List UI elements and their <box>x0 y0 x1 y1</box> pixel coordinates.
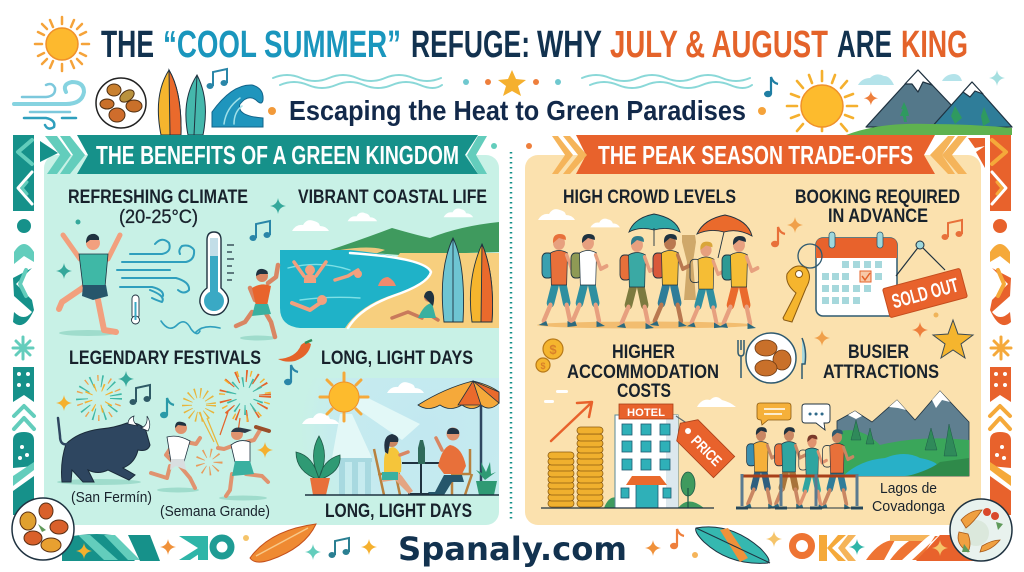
heading banner: trade-offs: THE PEAK SEASON TRADE-OFFS <box>598 140 913 170</box>
icon: sold out sign <box>882 241 968 318</box>
section: refreshing climate: REFRESHING CLIMATE <box>68 187 248 208</box>
icon: sold out sign: SOLD OUT <box>890 275 961 313</box>
icons: bottom decorations right <box>645 529 782 558</box>
umbrellas <box>629 214 752 258</box>
icon: sun right <box>787 71 857 131</box>
decoration: water ripples <box>161 321 220 334</box>
border: bottom left motif <box>62 534 249 561</box>
fireworks <box>79 373 268 471</box>
caption: Lagos de Covadonga: Lagos de <box>880 480 937 497</box>
icon: bull <box>57 416 150 485</box>
section: legendary festivals <box>56 348 273 520</box>
icon: key <box>783 244 822 322</box>
caption: Semana Grande: (Semana Grande) <box>160 503 270 520</box>
icon: coins: $ <box>549 342 557 357</box>
title: THE <box>101 24 154 66</box>
icon: sparkle <box>56 263 72 279</box>
section: busier attractions <box>736 342 969 515</box>
heading banner: benefits: THE BENEFITS OF A GREEN KINGDOM <box>96 140 459 170</box>
icon: bottom orange surfboard <box>250 524 316 562</box>
icon: mountains <box>846 70 1012 135</box>
icon: tree <box>681 472 695 508</box>
icon: plate and cutlery <box>738 333 806 383</box>
title: “COOL SUMMER” <box>163 24 401 66</box>
section: accommodation costs: HIGHER <box>612 342 675 363</box>
title: WHY <box>537 24 602 66</box>
icon: bottom teal surfboard <box>696 527 770 563</box>
illustration: beach <box>280 208 499 328</box>
section: refreshing climate <box>56 187 286 336</box>
icon: price tag <box>670 413 735 478</box>
icon: jumping person <box>59 234 120 336</box>
title: KING <box>901 24 968 66</box>
icon: coins <box>536 339 563 372</box>
surfboards <box>442 238 493 322</box>
section: high crowd levels: HIGH CROWD LEVELS <box>563 187 736 208</box>
icon: coin stacks <box>548 427 603 507</box>
icon: festival runner one <box>151 422 200 492</box>
subtitle: Escaping the Heat to Green Paradises <box>289 95 746 126</box>
sunbather <box>392 291 438 320</box>
icon: large thermometer <box>200 232 234 315</box>
illustration: terrace <box>296 373 499 495</box>
title <box>101 24 968 66</box>
section: accommodation costs <box>536 339 736 508</box>
icon: wind <box>14 82 84 129</box>
section: busier attractions: BUSIER <box>848 342 909 363</box>
icon: hotel <box>604 404 704 508</box>
section: accommodation costs: COSTS <box>617 381 671 402</box>
section: long light days: LONG, LIGHT DAYS <box>321 348 473 369</box>
decorative dots and star <box>268 70 766 115</box>
icon: chili <box>278 340 312 362</box>
corner triangle motif <box>40 141 58 162</box>
umbrella <box>418 381 499 495</box>
decoration: waves <box>273 75 752 88</box>
section: long light days <box>296 348 499 522</box>
plant <box>296 436 340 495</box>
icons: bottom decorations left <box>305 538 377 560</box>
icon: surfboards <box>158 70 205 135</box>
icon: bottom right food plate <box>950 499 1012 561</box>
footer brand: Spanaly.com <box>398 530 627 568</box>
border: right strip <box>990 135 1011 515</box>
section: high crowd levels <box>537 187 758 329</box>
border: left strip <box>13 135 34 515</box>
queue barrier <box>736 474 863 508</box>
section: booking: BOOKING REQUIRED <box>795 187 960 208</box>
clouds <box>544 390 736 407</box>
icon: note teal <box>284 365 298 385</box>
caption: Lagos de Covadonga <box>872 480 946 515</box>
statue <box>682 235 696 300</box>
icon: note <box>250 221 270 241</box>
panel: trade-offs <box>525 135 985 525</box>
icons: sparkles and star <box>814 312 973 358</box>
decoration: corner motif <box>968 138 985 168</box>
small plant <box>476 462 497 495</box>
icon: runner <box>236 265 278 340</box>
walkers <box>539 234 578 327</box>
section: busier attractions: ATTRACTIONS <box>823 362 939 383</box>
icon: title sun <box>35 17 89 71</box>
illustration: crowd <box>537 214 758 329</box>
icon: coins: $ <box>540 361 546 371</box>
section: long light days: LONG, LIGHT DAYS <box>325 501 472 522</box>
speech bubbles <box>757 403 830 430</box>
swimmers <box>292 262 396 310</box>
caption: San Fermin: (San Fermín) <box>71 489 152 506</box>
panel: benefits <box>40 135 499 525</box>
icon: breeze <box>117 240 194 302</box>
icon: hotel: HOTEL <box>627 407 665 419</box>
icon: bottom left food plate <box>12 498 74 560</box>
icons: top right clouds and sparkles <box>858 70 1005 105</box>
table and diners <box>374 428 472 495</box>
section: booking <box>771 187 968 322</box>
section: refreshing climate: (20-25°C) <box>119 207 198 228</box>
section: booking: IN ADVANCE <box>828 206 928 227</box>
icons: notes and sparkles <box>56 371 273 458</box>
section: vibrant coastal life <box>236 187 499 340</box>
icon: calendar <box>816 232 897 316</box>
icon: small thermometer <box>132 295 140 324</box>
section: vibrant coastal life: VIBRANT COASTAL LIFE <box>298 187 487 208</box>
heading banner: benefits <box>45 135 487 174</box>
divider <box>510 152 512 522</box>
icon: note <box>206 69 228 89</box>
title: JULY & AUGUST <box>610 24 828 66</box>
title: ARE <box>837 24 892 66</box>
caption: Lagos de Covadonga: Covadonga <box>872 498 946 515</box>
icon: price tag: PRICE <box>687 432 725 470</box>
icon: rising arrow <box>551 402 592 441</box>
title: REFUGE: <box>411 24 530 66</box>
illustration: queue <box>744 427 853 509</box>
illustration: lake landscape <box>837 391 969 476</box>
icon: festival runner two <box>218 427 269 500</box>
icon: plate <box>96 78 146 128</box>
icons: notes <box>771 217 962 247</box>
border: bottom right motif <box>792 535 985 561</box>
section: accommodation costs: ACCOMMODATION <box>567 362 719 383</box>
heading banner: trade-offs <box>552 135 967 174</box>
section: legendary festivals: LEGENDARY FESTIVALS <box>69 348 261 369</box>
icon: wave <box>212 85 263 127</box>
icon: note blue <box>764 77 778 97</box>
railing <box>335 458 372 495</box>
